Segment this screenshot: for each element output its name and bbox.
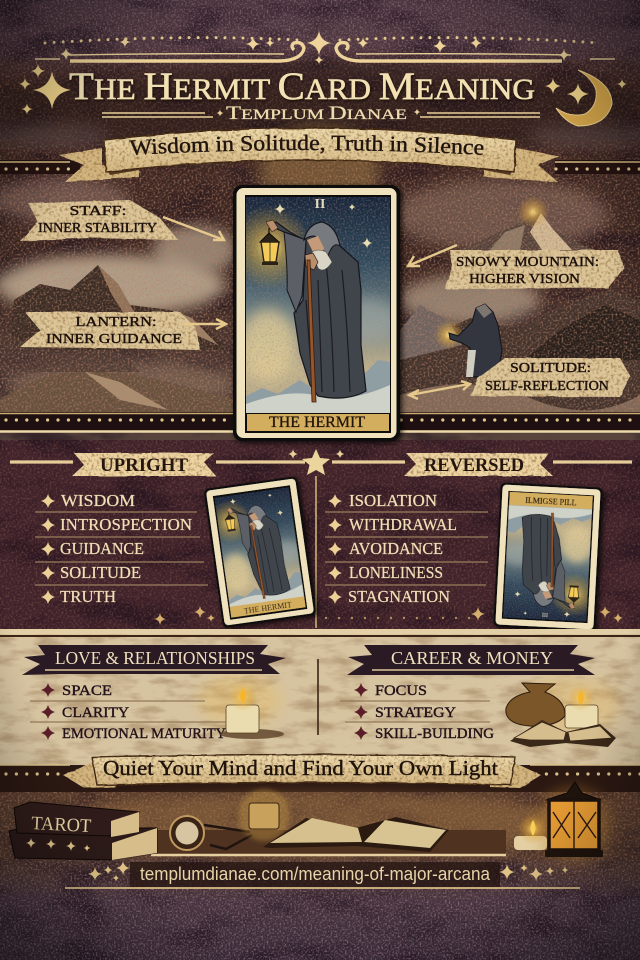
lower band: [0, 765, 640, 792]
warm glow behind shelf: [40, 793, 600, 857]
icon: small hooded figure with glow: [434, 304, 502, 377]
subtitle: [102, 103, 540, 124]
card: the hermit: [228, 185, 400, 441]
ribbon: reversed: [404, 453, 553, 476]
icon: open book: [263, 817, 449, 852]
list: upright: INTROSPECTION: [60, 515, 192, 534]
label: staff: INNER STABILITY: [38, 220, 157, 235]
title: THE HERMIT CARD MEANING: [69, 65, 535, 108]
card name bar: THE HERMIT: [269, 414, 366, 431]
panel: parchment: [0, 629, 640, 765]
list: career: SKILL-BUILDING: [375, 726, 494, 742]
icon: stacked tarot books: [9, 802, 157, 860]
website url: templumdianae.com/meaning-of-major-arcana: [140, 864, 491, 884]
sparkles under lists: [154, 606, 623, 625]
illustrated landscape behind the central card: [0, 120, 640, 415]
label: lantern: LANTERN:: [76, 315, 156, 330]
arrow: lantern: [184, 319, 226, 329]
icon: pocket watch: [170, 816, 252, 850]
subtitle: TEMPLUM D IANAE: [226, 103, 407, 124]
list: reversed: AVOIDANCE: [349, 539, 443, 558]
ribbon: upright: UPRIGHT: [100, 455, 188, 476]
ribbon: reversed: REVERSED: [424, 455, 524, 476]
icon: small candle: [514, 814, 548, 850]
card: reversed small: III: [542, 613, 548, 619]
list: reversed: WITHDRAWAL: [349, 515, 457, 534]
card name bar: [247, 414, 389, 431]
icon: coin pouch, candle and open book: [506, 683, 616, 747]
list: love: SPACE: [62, 683, 112, 699]
list: reversed: [325, 491, 488, 606]
label: solitude: SELF-REFLECTION: [485, 378, 609, 393]
label: staff: STAFF:: [70, 204, 126, 219]
shelf: [151, 830, 506, 855]
list: upright: WISDOM: [61, 491, 135, 510]
header dark band: [0, 60, 640, 145]
sparkles around title: [19, 64, 627, 114]
list: upright: TRUTH: [60, 587, 116, 606]
list: upright: SOLITUDE: [60, 563, 141, 582]
list: love: [41, 683, 226, 742]
card: reversed small: ILMIGSE PILL: [525, 496, 577, 507]
ribbon: love and relationships: [22, 645, 286, 675]
website url: [65, 861, 580, 888]
ribbon: career and money: [347, 645, 595, 675]
label: solitude: [470, 358, 630, 397]
ribbon: upright: [72, 453, 216, 476]
label: solitude: SOLITUDE:: [510, 360, 591, 375]
ribbon: closing message: [63, 754, 541, 788]
label: lantern: INNER GUIDANCE: [46, 331, 182, 346]
dotted side rails: [0, 160, 640, 174]
header ornament: [35, 30, 615, 64]
label: lantern: [20, 312, 200, 350]
ribbon: love and relationships: LOVE & RELATIONSHIPS: [55, 648, 255, 668]
list: upright: [35, 491, 208, 606]
label: snowy mountain: SNOWY MOUNTAIN:: [456, 254, 599, 269]
list: upright: GUIDANCE: [60, 539, 144, 558]
ribbon: career and money: CAREER & MONEY: [391, 648, 553, 668]
label: snowy mountain: HIGHER VISION: [469, 271, 580, 286]
ribbon: closing message: Quiet Your Mind and Find Your Own Light: [103, 756, 498, 780]
icon: crescent moon: [556, 70, 612, 126]
list: reversed: ISOLATION: [349, 491, 437, 510]
icon: candle left: [220, 683, 284, 739]
list: love: CLARITY: [62, 705, 129, 721]
divider: [315, 476, 317, 628]
scene bottom rails: [0, 412, 640, 432]
arrow: staff: [163, 217, 224, 240]
list: career: FOCUS: [375, 683, 427, 699]
arrow: solitude: [409, 381, 470, 399]
icon: pillar candle: [238, 789, 290, 841]
arrow: snowy mountain: [408, 245, 457, 266]
card: reversed small: [493, 482, 604, 632]
card: upright small: [204, 476, 316, 628]
ribbon: tagline: [58, 126, 560, 182]
card: upright small: THE HERMIT: [243, 600, 292, 616]
list: career: STRATEGY: [375, 705, 456, 721]
label: staff: [20, 200, 178, 241]
text: book spine: TAROT: [31, 813, 92, 837]
icon: star: [302, 449, 330, 475]
label: snowy mountain: [445, 250, 624, 289]
ribbon: tagline: Wisdom in Solitude, Truth in Silence: [129, 134, 484, 156]
list: love: EMOTIONAL MATURITY: [62, 726, 226, 742]
heading row: [10, 449, 632, 475]
icon: lantern: [536, 782, 612, 863]
list: career: [354, 683, 494, 742]
list: reversed: STAGNATION: [348, 587, 450, 606]
card numeral: II: [315, 197, 325, 212]
list: reversed: LONELINESS: [349, 563, 443, 582]
